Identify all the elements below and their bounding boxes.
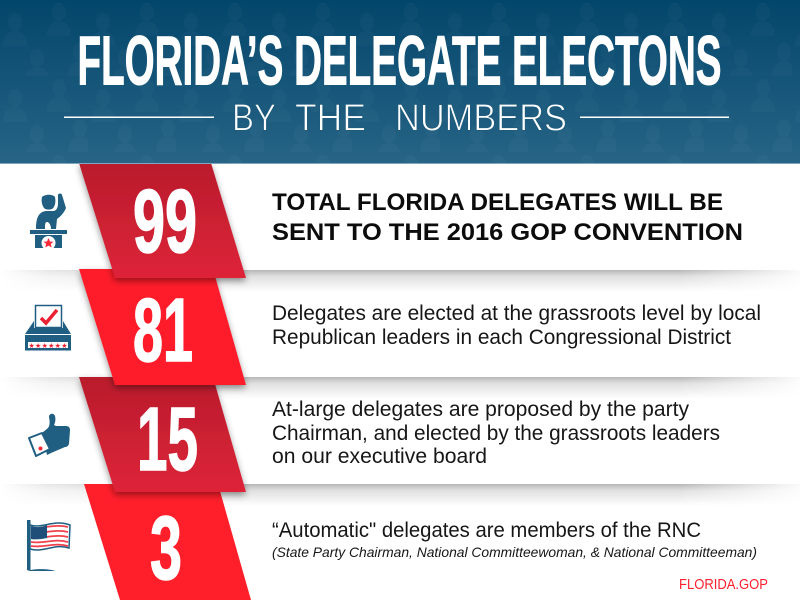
icon: speaker at podium [30, 194, 67, 250]
text: grassroots delegates: Delegates are elected at the grassroots level by local [272, 302, 761, 325]
text: at-large delegates: on our executive board [272, 445, 487, 468]
subtitle with rules: NUMBERS [395, 98, 567, 140]
icon: ballot box [25, 306, 71, 350]
subtitle with rules: BY [232, 98, 276, 140]
number: 15: 15 [137, 390, 198, 490]
text: at-large delegates: Chairman, and elected by the grassroots leaders [272, 422, 720, 445]
row shadows [0, 270, 800, 506]
text: automatic delegates [272, 519, 757, 560]
number: 81: 81 [133, 281, 193, 381]
header band [0, 0, 800, 164]
ribbon: 99 [79, 163, 246, 278]
footer brand: FLORIDA.GOP [679, 576, 768, 593]
subtitle with rules [64, 98, 729, 140]
ribbon: 15 [79, 377, 246, 492]
text: automatic delegates: (State Party Chairman, National Committeewoman, & National Committeeman) [272, 544, 757, 560]
icon: American flag [27, 520, 70, 571]
number: 3: 3 [150, 499, 182, 599]
ribbon: 3 [84, 484, 251, 600]
number: 99: 99 [133, 172, 197, 272]
text: at-large delegates: At-large delegates are proposed by the party [272, 398, 689, 421]
text: grassroots delegates [272, 302, 761, 349]
text: automatic delegates: “Automatic" delegates are members of the RNC [272, 519, 701, 542]
text: total delegates: TOTAL FLORIDA DELEGATES WILL BE [272, 189, 723, 216]
icon: ballot box: ★★★★★★ [28, 342, 68, 350]
text: at-large delegates [272, 398, 720, 468]
icon: thumbs up [29, 414, 70, 456]
ribbon: 81 [79, 269, 246, 385]
subtitle with rules: THE [295, 98, 366, 140]
text: total delegates [272, 189, 743, 246]
text: grassroots delegates: Republican leaders in each Congressional District [272, 326, 731, 349]
text: total delegates: SENT TO THE 2016 GOP CONVENTION [272, 219, 743, 246]
